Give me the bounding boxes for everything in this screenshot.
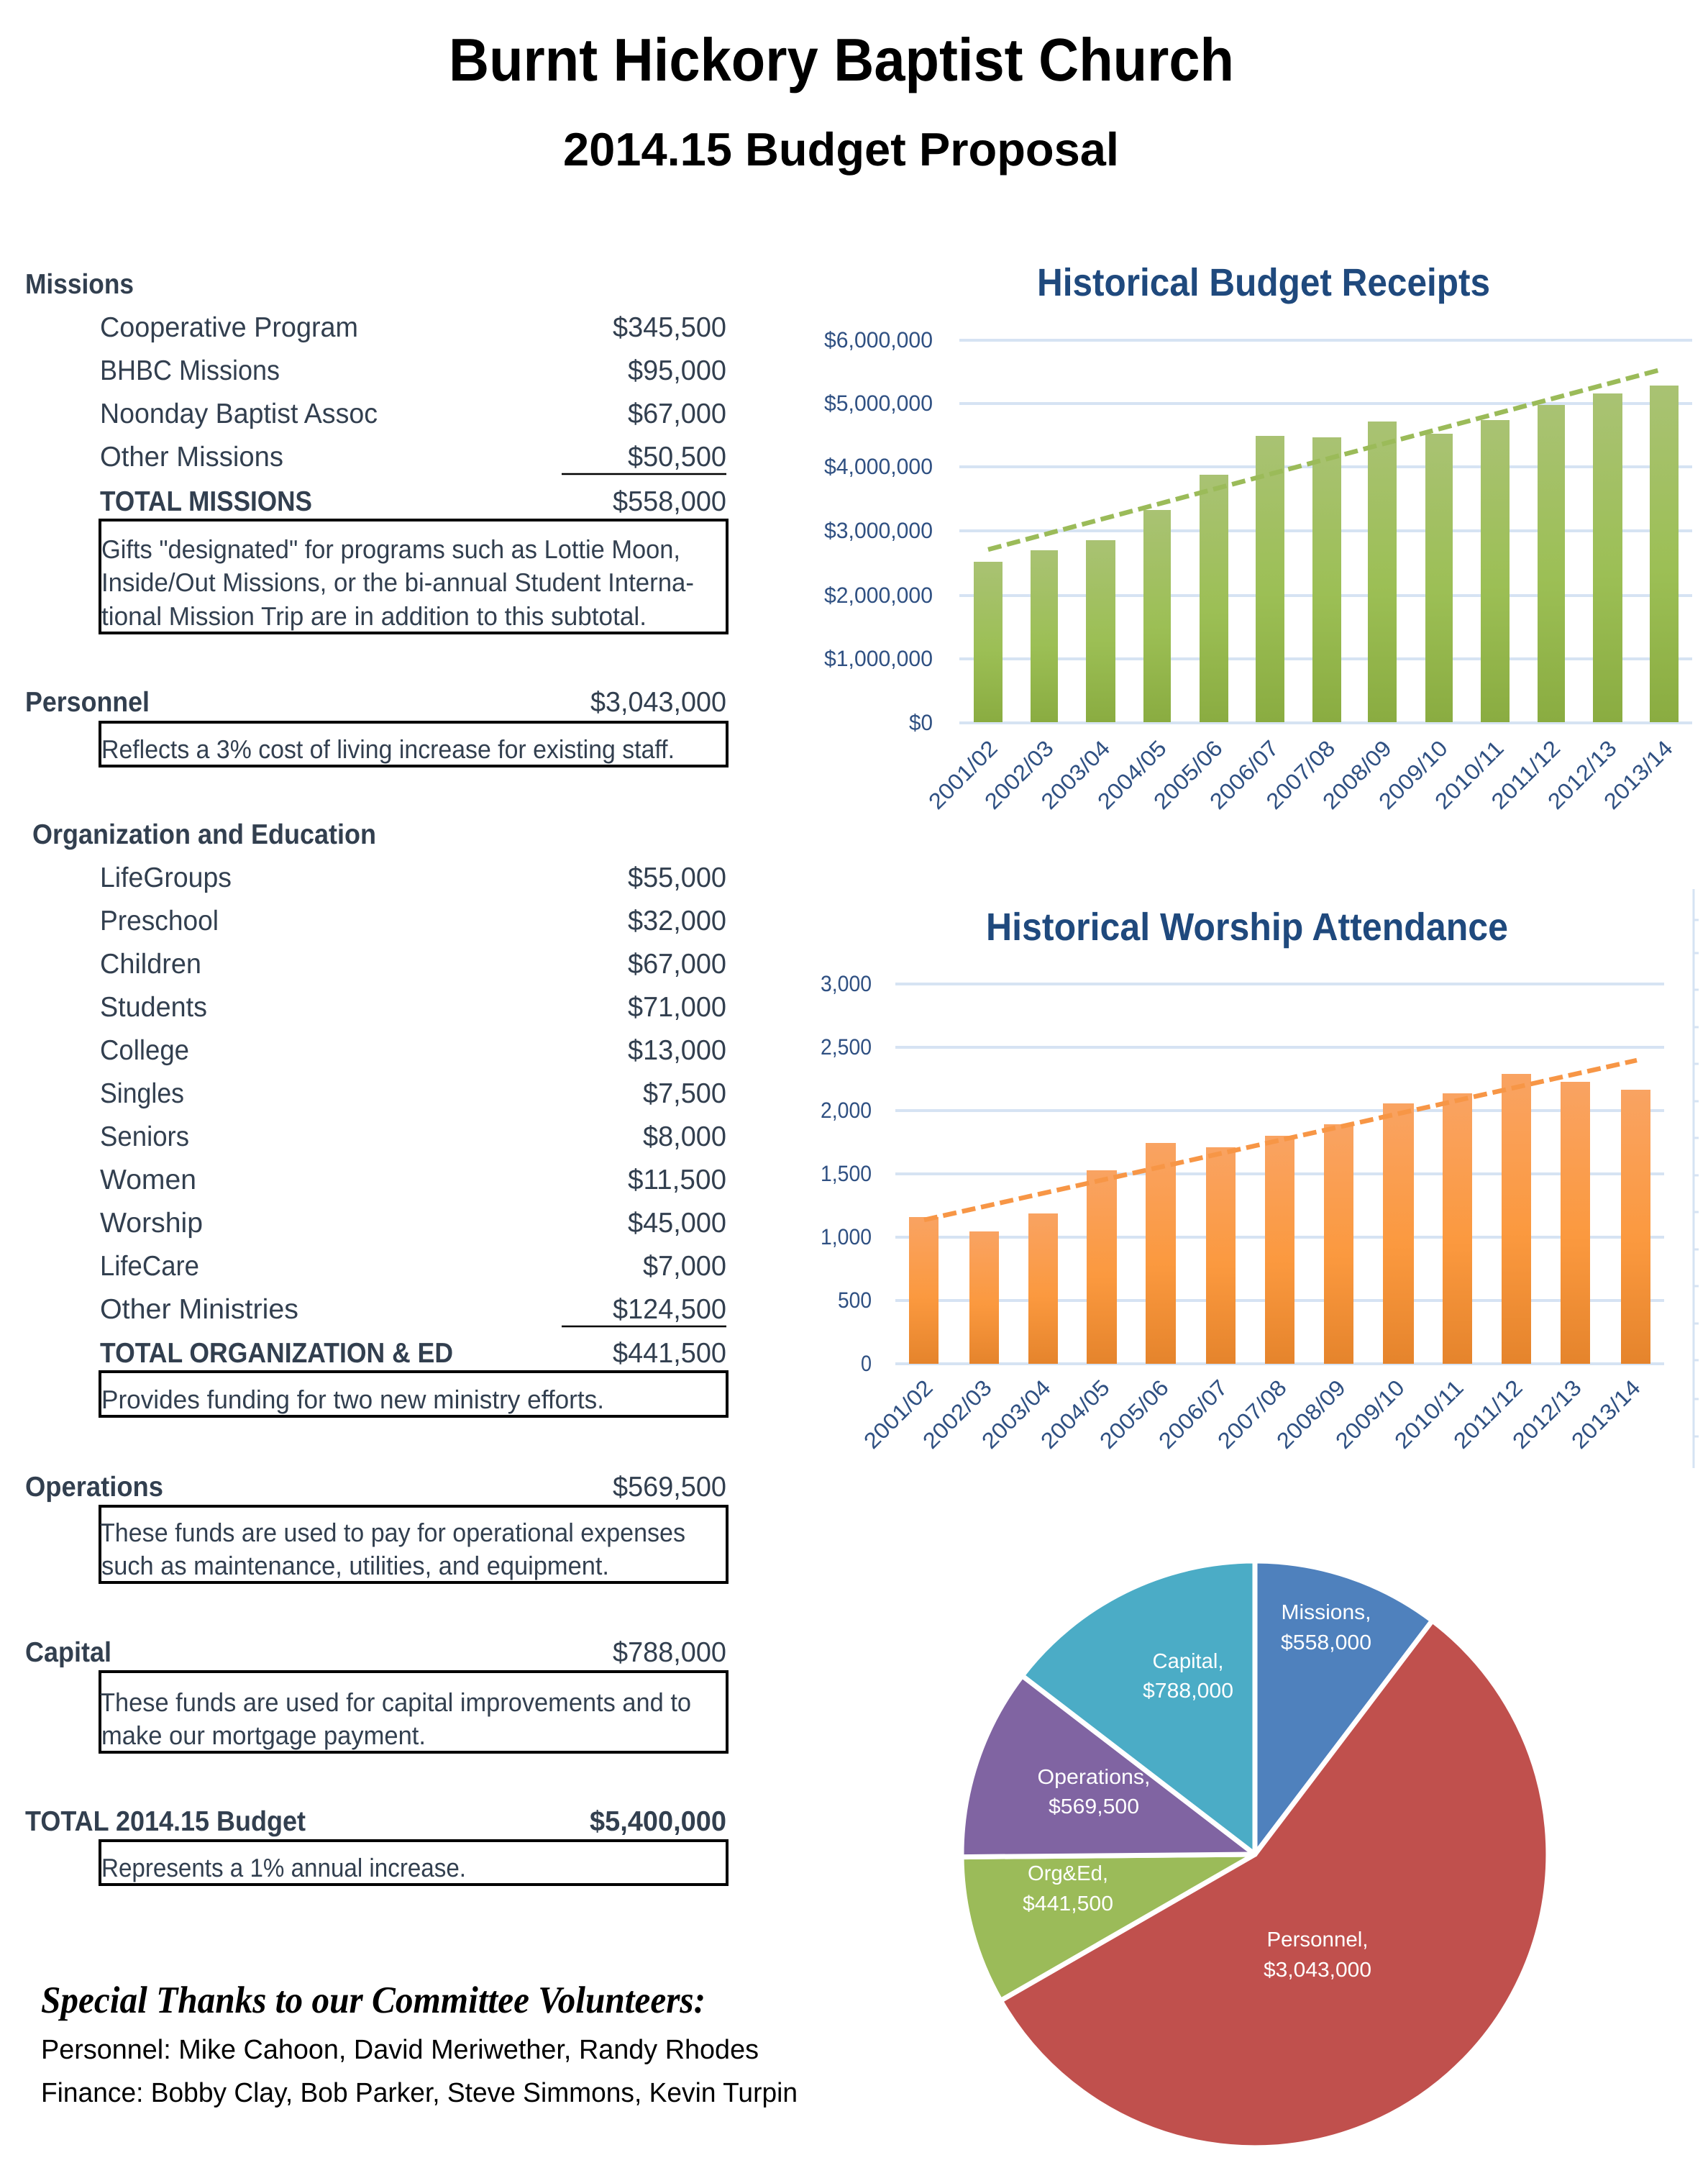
row: noonday baptist assoc: [100, 398, 726, 429]
row: women: [100, 1165, 726, 1195]
row: other ministries: [100, 1294, 726, 1325]
x axis labels: 2009/10: [1374, 735, 1453, 814]
row: worship: Worship: [100, 1208, 203, 1239]
row: seniors: Seniors: [100, 1121, 189, 1152]
label: organization and education: Org&Ed,: [1028, 1862, 1108, 1885]
label: operations: Operations,: [1037, 1766, 1151, 1789]
panel: missions budget: [25, 269, 727, 633]
y axis labels: 2,500: [821, 1034, 872, 1060]
x axis labels: 2004/05: [1092, 735, 1172, 814]
heading: missions: Missions: [25, 269, 134, 300]
row: total budget: TOTAL 2014.15 Budget: [25, 1806, 306, 1837]
x axis labels: 2006/07: [1205, 735, 1284, 814]
panel: organization and education budget: [32, 819, 727, 1416]
row: singles: [100, 1078, 726, 1109]
row: total budget: $5,400,000: [590, 1806, 726, 1837]
row: cooperative program: $345,500: [613, 312, 726, 343]
y axis labels: $0: [909, 710, 933, 735]
panel: operations budget: [25, 1472, 727, 1582]
row: preschool: [100, 906, 726, 937]
row: college: $13,000: [628, 1035, 726, 1066]
row: capital: [25, 1637, 726, 1668]
row: worship: [100, 1208, 726, 1239]
row: children: [100, 949, 726, 980]
y axis labels: 0: [861, 1351, 872, 1376]
x axis labels: 2011/12: [1448, 1375, 1527, 1454]
x axis labels: 2003/04: [1036, 735, 1115, 814]
label: capital: [1143, 1650, 1233, 1703]
row: singles: $7,500: [643, 1078, 726, 1109]
chart: historical worship attendance: [821, 906, 1664, 1454]
y axis labels: 2,000: [821, 1098, 872, 1123]
x axis labels: 2008/09: [1271, 1375, 1351, 1454]
x axis labels: 2012/13: [1507, 1375, 1586, 1454]
bars: [909, 1074, 1650, 1364]
label: personnel: Personnel,: [1267, 1928, 1368, 1951]
row: capital: $788,000: [613, 1637, 726, 1668]
slice: organization and education: [962, 1854, 1255, 2000]
y axis labels: 500: [838, 1288, 872, 1313]
row: operations: Operations: [25, 1472, 163, 1503]
row: personnel: [25, 687, 726, 718]
row: operations: $569,500: [613, 1472, 726, 1503]
row: total budget: [25, 1806, 726, 1837]
chart: budget pie: [962, 1561, 1548, 2148]
row: children: $67,000: [628, 949, 726, 980]
x axis labels: 2005/06: [1148, 735, 1228, 814]
panel: committee thanks: [41, 1980, 798, 2108]
row: operations: [25, 1472, 726, 1503]
row: worship: $45,000: [628, 1208, 726, 1239]
x axis labels: [859, 1375, 1645, 1454]
y axis labels: $5,000,000: [824, 391, 933, 416]
note box: capital improvements: make our mortgage payment.: [101, 1721, 426, 1750]
chart: historical budget receipts: [824, 261, 1692, 814]
label: capital: Capital,: [1152, 1650, 1224, 1673]
y axis labels: 3,000: [821, 971, 872, 996]
label: missions: $558,000: [1281, 1631, 1371, 1654]
row: cooperative program: Cooperative Program: [100, 312, 358, 343]
row: total organization and education: $441,500: [613, 1338, 726, 1369]
note box: operational expenses: [100, 1506, 727, 1582]
x axis labels: 2002/03: [979, 735, 1059, 814]
x axis labels: 2012/13: [1543, 735, 1622, 814]
label: capital: $788,000: [1143, 1680, 1233, 1703]
x axis labels: 2008/09: [1317, 735, 1397, 814]
label: missions: Missions,: [1282, 1601, 1371, 1624]
y axis labels: $6,000,000: [824, 327, 933, 352]
row: lifecare: [100, 1251, 726, 1282]
x axis labels: 2013/14: [1599, 735, 1678, 814]
row: personnel: $3,043,000: [590, 687, 726, 718]
row: cooperative program: [100, 312, 726, 343]
note box: new ministry efforts: Provides funding for two new ministry efforts.: [101, 1385, 604, 1414]
y axis labels: $1,000,000: [824, 646, 933, 671]
heading: organization and education: Organization and Education: [32, 819, 376, 850]
row: other missions: [100, 442, 726, 473]
row: women: $11,500: [628, 1165, 726, 1195]
note box: annual increase: Represents a 1% annual increase.: [101, 1853, 466, 1882]
x axis labels: [923, 735, 1678, 814]
x axis labels: 2010/11: [1389, 1375, 1469, 1454]
row: seniors: $8,000: [643, 1121, 726, 1152]
row: total missions: $558,000: [613, 486, 726, 517]
label: organization and education: [1023, 1862, 1113, 1915]
row: students: $71,000: [628, 992, 726, 1023]
y axis labels: $2,000,000: [824, 583, 933, 608]
note box: designated gifts: Inside/Out Missions, or the bi-annual Student Interna-: [101, 568, 694, 597]
row: other ministries: Other Ministries: [100, 1294, 298, 1325]
label: operations: $569,500: [1049, 1795, 1139, 1818]
x axis labels: 2003/04: [977, 1375, 1056, 1454]
y axis labels: $4,000,000: [824, 454, 933, 479]
text: finance committee: Finance: Bobby Clay, Bob Parker, Steve Simmons, Kevin Turpin: [41, 2078, 798, 2108]
row: BHBC missions: [100, 355, 726, 386]
row: women: Women: [100, 1165, 196, 1195]
row: other missions: Other Missions: [100, 442, 283, 473]
x axis labels: 2009/10: [1330, 1375, 1410, 1454]
row: noonday baptist assoc: $67,000: [628, 398, 726, 429]
note box: cost of living: [100, 722, 727, 766]
note box: new ministry efforts: [100, 1372, 727, 1416]
row: total organization and education: TOTAL ORGANIZATION & ED: [100, 1338, 453, 1369]
row: students: Students: [100, 992, 207, 1023]
slice: missions: [1255, 1561, 1433, 1854]
label: personnel: $3,043,000: [1264, 1959, 1371, 1982]
y axis labels: 1,000: [821, 1224, 872, 1249]
row: total missions: TOTAL MISSIONS: [100, 486, 312, 517]
note box: operational expenses: These funds are used to pay for operational expenses: [100, 1518, 685, 1547]
row: BHBC missions: $95,000: [628, 355, 726, 386]
x axis labels: 2005/06: [1095, 1375, 1174, 1454]
row: students: [100, 992, 726, 1023]
x axis labels: 2013/14: [1566, 1375, 1645, 1454]
x axis labels: 2007/08: [1213, 1375, 1292, 1454]
subtitle: 2014.15 Budget Proposal: [563, 123, 1119, 176]
title: Burnt Hickory Baptist Church: [449, 26, 1234, 94]
row: preschool: Preschool: [100, 906, 219, 937]
row: seniors: [100, 1121, 726, 1152]
note box: annual increase: [100, 1841, 727, 1885]
chart title: Historical Worship Attendance: [986, 906, 1508, 949]
note box: capital improvements: [100, 1672, 727, 1752]
heading: special thanks: Special Thanks to our Committee Volunteers:: [41, 1980, 705, 2021]
label: operations: [1037, 1766, 1151, 1818]
row: lifegroups: [100, 862, 726, 893]
row: lifecare: LifeCare: [100, 1251, 199, 1282]
x axis labels: 2001/02: [859, 1375, 938, 1454]
note box: operational expenses: such as maintenance, utilities, and equipment.: [101, 1551, 609, 1580]
note box: designated gifts: tional Mission Trip are in addition to this subtotal.: [101, 601, 647, 631]
y axis labels: 1,500: [821, 1161, 872, 1186]
slice: capital: [1022, 1561, 1255, 1854]
panel: capital budget: [25, 1637, 727, 1752]
text: personnel committee: Personnel: Mike Cahoon, David Meriwether, Randy Rhodes: [41, 2035, 759, 2065]
row: lifecare: $7,000: [643, 1251, 726, 1282]
row: capital: Capital: [25, 1637, 111, 1668]
y axis labels: $3,000,000: [824, 518, 933, 543]
trend line: [924, 1060, 1637, 1220]
note box: cost of living: Reflects a 3% cost of living increase for existing staff.: [101, 734, 675, 764]
bars: [974, 386, 1679, 722]
x axis labels: 2006/07: [1154, 1375, 1233, 1454]
row: other missions: $50,500: [628, 442, 726, 473]
row: college: [100, 1035, 726, 1066]
row: lifegroups: LifeGroups: [100, 862, 232, 893]
slice: personnel: [1000, 1621, 1548, 2148]
row: personnel: Personnel: [25, 687, 150, 718]
x axis labels: 2004/05: [1036, 1375, 1115, 1454]
label: missions: [1281, 1601, 1371, 1654]
chart title: Historical Budget Receipts: [1037, 261, 1490, 304]
note box: designated gifts: Gifts "designated" for programs such as Lottie Moon,: [101, 534, 680, 564]
row: noonday baptist assoc: Noonday Baptist Assoc: [100, 398, 378, 429]
x axis labels: 2011/12: [1486, 735, 1565, 814]
slice: operations: [962, 1676, 1255, 1857]
x axis labels: 2002/03: [918, 1375, 997, 1454]
panel: total budget: [25, 1806, 727, 1885]
x axis labels: 2010/11: [1430, 735, 1509, 814]
trend line: [988, 370, 1661, 550]
label: personnel: [1264, 1928, 1371, 1982]
y axis labels: [824, 327, 933, 735]
x axis labels: 2007/08: [1261, 735, 1340, 814]
panel: personnel budget: [25, 687, 727, 766]
row: lifegroups: $55,000: [628, 862, 726, 893]
note box: capital improvements: These funds are used for capital improvements and to: [100, 1687, 691, 1717]
y axis labels: [821, 971, 872, 1376]
note box: designated gifts: [100, 520, 727, 633]
row: preschool: $32,000: [628, 906, 726, 937]
row: total organization and education: [100, 1338, 726, 1369]
row: college: College: [100, 1035, 189, 1066]
row: singles: Singles: [100, 1078, 184, 1109]
label: organization and education: $441,500: [1023, 1892, 1113, 1915]
x axis labels: 2001/02: [923, 735, 1003, 814]
row: total missions: [100, 486, 726, 517]
row: BHBC missions: BHBC Missions: [100, 355, 280, 386]
row: other ministries: $124,500: [613, 1294, 726, 1325]
row: children: Children: [100, 949, 201, 980]
